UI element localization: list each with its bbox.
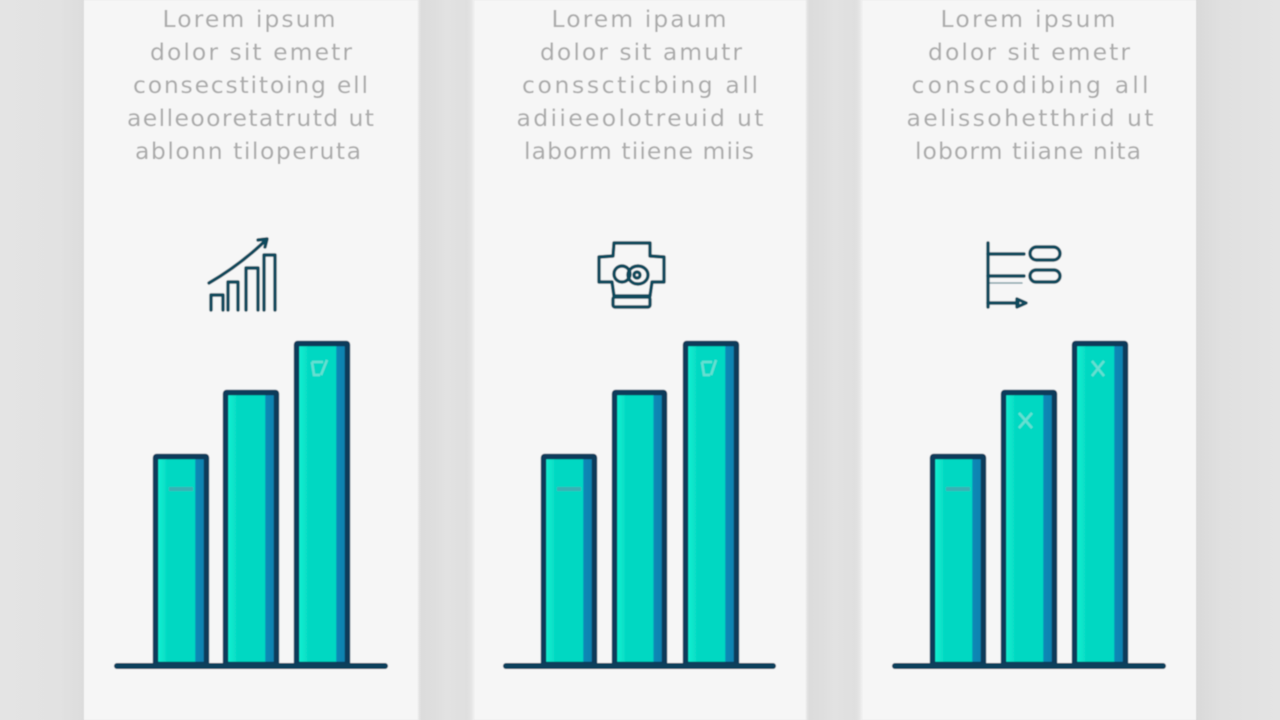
bar chart: right xyxy=(892,344,1166,669)
text block: left description: Lorem ipsum xyxy=(162,5,336,33)
panel: middle column xyxy=(474,0,806,720)
bar chart: left xyxy=(114,344,388,669)
text block: right description: conscodibing all xyxy=(912,71,1148,99)
panel: right column xyxy=(862,0,1196,720)
bar mark: dash xyxy=(946,487,970,491)
text block: right description: aelissohetthrid ut xyxy=(906,104,1154,132)
text block: right description: Lorem ipsum xyxy=(940,5,1116,33)
bar mark: check xyxy=(312,360,327,375)
icon: gear chip xyxy=(599,243,664,307)
icon: branching list xyxy=(988,243,1060,307)
text block: right description xyxy=(906,5,1154,165)
bar mark: x xyxy=(1019,413,1032,428)
text block: middle description: adiieeolotreuid ut xyxy=(516,104,764,132)
text block: middle description: laborm tiiene miis xyxy=(524,137,754,165)
text block: middle description: consscticbing all xyxy=(522,71,758,99)
icon: rising bars with arrow xyxy=(209,239,275,310)
bar mark: dash xyxy=(557,487,581,491)
text block: left description: aelleooretatrutd ut xyxy=(127,104,374,132)
chart baseline xyxy=(114,663,388,669)
text block: middle description: dolor sit amutr xyxy=(540,38,742,66)
chart baseline xyxy=(892,663,1166,669)
chart baseline xyxy=(503,663,776,669)
text block: right description: loborm tiiane nita xyxy=(915,137,1141,165)
text block: left description: ablonn tiloperuta xyxy=(135,137,361,165)
bar mark: check xyxy=(702,360,716,375)
bar mark: dash xyxy=(169,487,193,491)
text block: right description: dolor sit emetr xyxy=(928,38,1130,66)
bar mark: x small xyxy=(1092,361,1104,376)
text block: left description: consecstitoing ell xyxy=(133,71,368,99)
text block: middle description xyxy=(516,5,764,165)
text block: left description xyxy=(127,5,374,165)
text block: left description: dolor sit emetr xyxy=(150,38,352,66)
panel: left column xyxy=(84,0,418,720)
bar chart: middle xyxy=(503,344,776,669)
text block: middle description: Lorem ipaum xyxy=(552,5,726,33)
